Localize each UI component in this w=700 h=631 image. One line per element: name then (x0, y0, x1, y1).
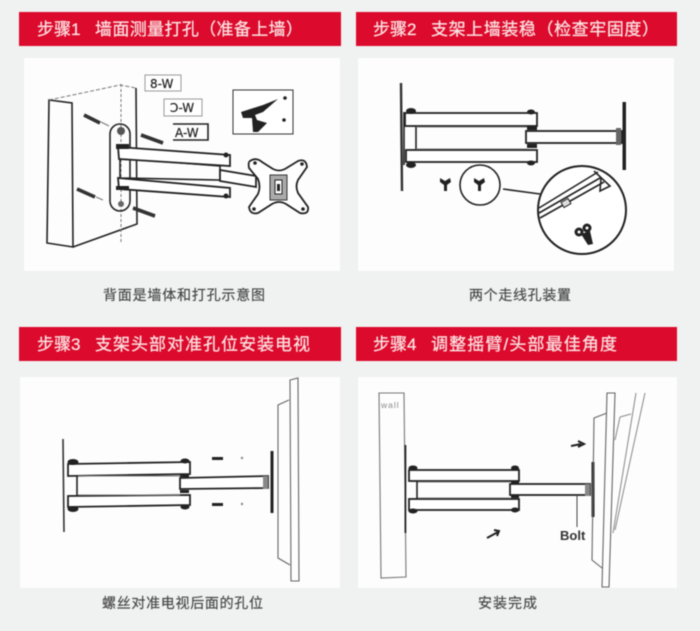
head plate (592, 462, 594, 517)
arrow: upper (571, 441, 584, 447)
panel: step 3 (19, 327, 341, 611)
bolt label (560, 495, 586, 543)
small screw (440, 178, 451, 191)
TV tilted (613, 393, 645, 533)
VESA head plate (249, 159, 308, 213)
heading: step 2: 支架上墙装稳（检查牢固度） (431, 20, 659, 39)
heading: step 4: 调整摇臂/头部最佳角度 (431, 335, 617, 354)
caption: step 2: 两个走线孔装置 (469, 287, 571, 303)
panel: step 2 (356, 12, 677, 303)
illustration: align arm with TV (20, 377, 340, 588)
panel: step 4 (356, 327, 677, 611)
arrow: lower (487, 530, 499, 538)
head plate (622, 102, 626, 170)
label: A-W (173, 124, 208, 140)
panel: step 1 (19, 12, 341, 303)
heading: step 1: 步骤1 (37, 20, 80, 39)
detail circle (538, 166, 626, 254)
icon: drill on wall (233, 90, 293, 134)
label: B-W: 8-W (150, 77, 173, 91)
heading: step 4: 步骤4 (373, 335, 416, 354)
heading: step 4 (356, 327, 677, 361)
TV upright (592, 393, 615, 587)
mounting plate (110, 124, 130, 211)
label: B-W (145, 75, 181, 91)
bolt label: Bolt (560, 528, 586, 543)
caption: step 1: 背面是墙体和打孔示意图 (103, 287, 265, 303)
caption: step 3: 螺丝对准电视后面的孔位 (102, 595, 263, 611)
wall line (63, 439, 64, 532)
heading: step 3 (19, 327, 341, 361)
illustration: adjust angle (358, 377, 677, 588)
swing arm (408, 466, 590, 514)
illustration: wall drilling and bracket (24, 58, 340, 271)
head plate (270, 451, 274, 513)
heading: step 1 (19, 12, 341, 46)
label: C-W (164, 99, 202, 116)
heading: step 3: 支架头部对准孔位安装电视 (95, 335, 310, 354)
caption: step 4: 安装完成 (478, 595, 537, 611)
wall block (47, 84, 137, 247)
TV side view (278, 378, 299, 581)
label: C-W: Ɔ-W (170, 101, 194, 115)
wall (379, 393, 406, 578)
swing arm (68, 458, 268, 512)
wall screws (77, 115, 163, 216)
heading: step 2 (356, 12, 677, 46)
zoom circle with screw (460, 165, 500, 205)
heading: step 1: 墙面测量打孔（准备上墙） (95, 20, 303, 39)
heading: step 3: 步骤3 (37, 335, 80, 354)
heading: step 2: 步骤2 (373, 20, 416, 39)
swing arms (116, 144, 256, 198)
wall line (401, 83, 402, 191)
swing arm (404, 108, 622, 168)
illustration: bracket side view with detail (358, 58, 674, 271)
wall: wall (380, 400, 400, 410)
label: A-W: A-W (175, 126, 199, 140)
screws (212, 457, 243, 506)
